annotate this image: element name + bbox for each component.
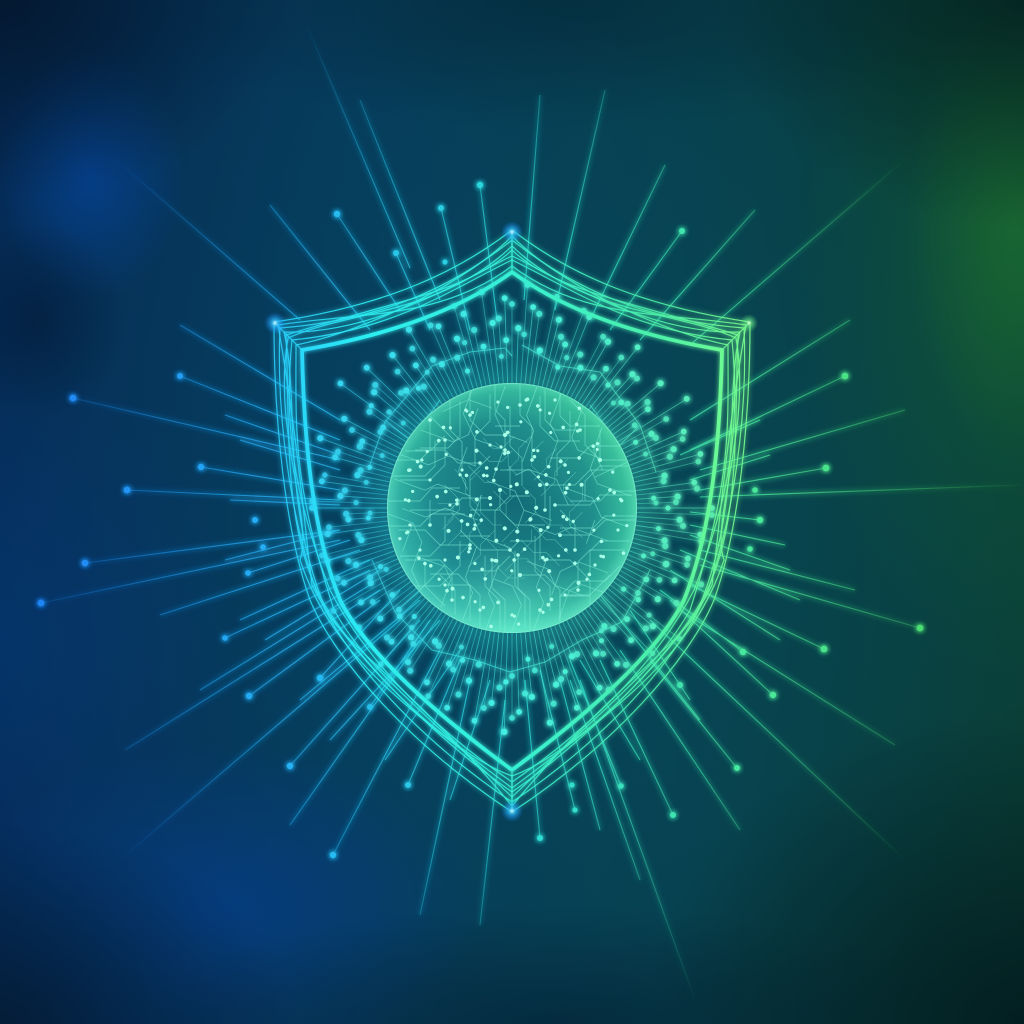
central circuit sphere	[386, 382, 638, 634]
shield corner flares	[264, 221, 758, 822]
inner rays, particles and circuit web	[306, 278, 718, 739]
shield outline wires	[260, 220, 764, 824]
sphere circuit nodes	[398, 397, 628, 628]
sphere halo	[376, 372, 648, 644]
sphere circuit traces	[388, 385, 636, 632]
